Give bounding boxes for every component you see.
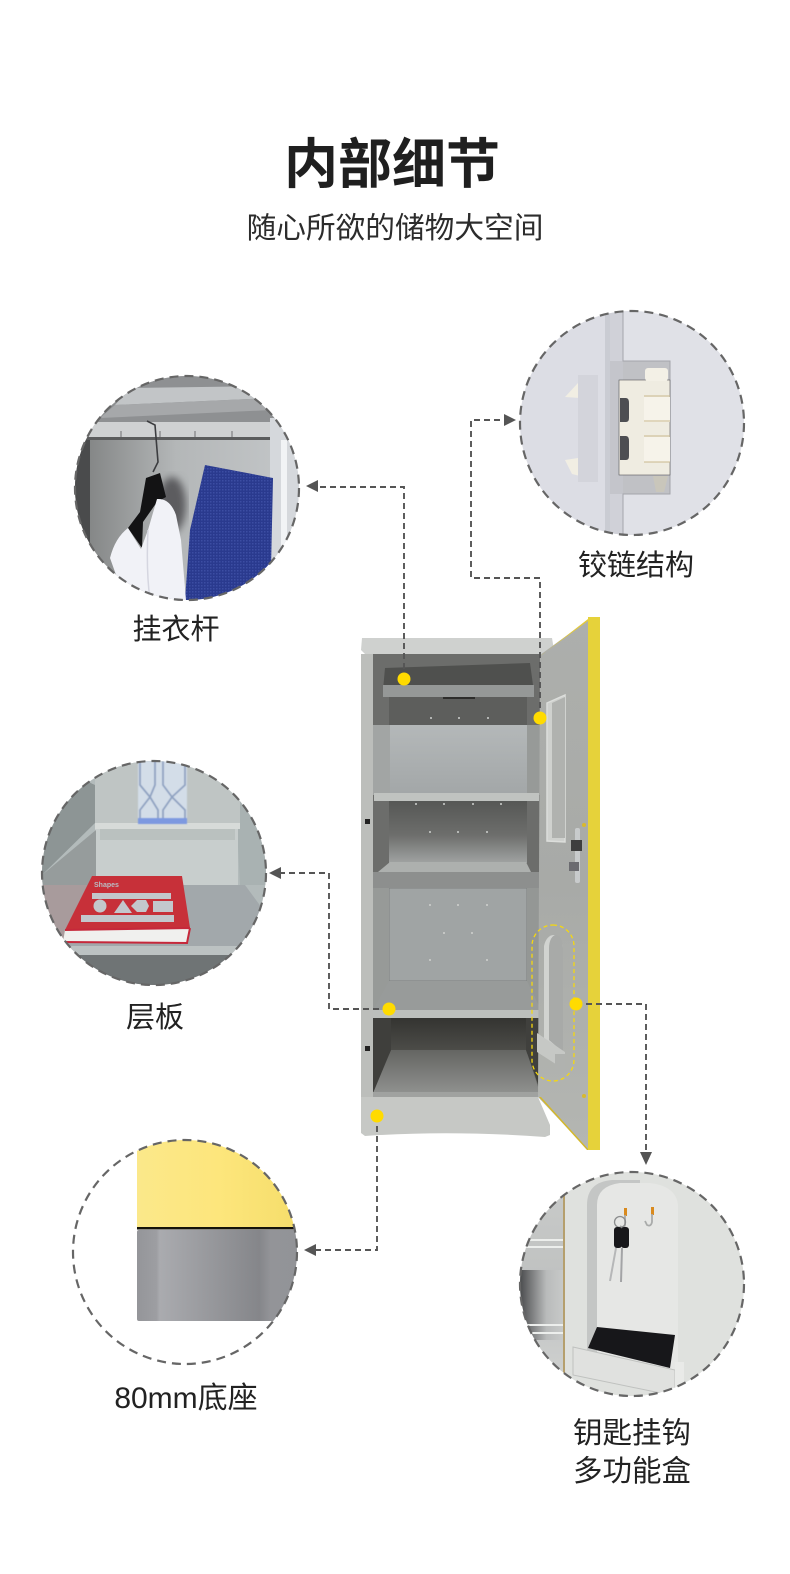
label: key hook and box: 钥匙挂钩	[573, 1417, 691, 1450]
title: 内部细节	[284, 135, 500, 195]
leader: hanging rail	[306, 480, 404, 679]
water bottles	[138, 761, 187, 824]
hooks	[620, 1207, 654, 1227]
label: base: 80mm底座	[114, 1382, 258, 1415]
label: shelf: 层板	[126, 1001, 184, 1034]
yoga mat	[185, 465, 273, 600]
hanger	[128, 421, 166, 548]
circle: shelf detail	[42, 761, 267, 985]
subtitle: 随心所欲的储物大空间	[247, 212, 543, 245]
circle: hanging rail detail	[75, 376, 300, 600]
lock	[569, 823, 586, 883]
door	[537, 617, 600, 1150]
hinge knuckles	[619, 368, 670, 492]
black item in box	[588, 1327, 675, 1368]
locker body side	[361, 654, 374, 1097]
recessed panel	[587, 1180, 640, 1352]
shelf lower	[373, 1010, 541, 1018]
leader: hinge	[471, 414, 540, 718]
book title: Shapes	[94, 882, 119, 889]
top cap	[361, 638, 554, 654]
yellow dashed capsule	[532, 925, 574, 1081]
shelf middle	[378, 862, 531, 872]
body hinge marks	[365, 819, 370, 824]
left fin	[565, 375, 598, 482]
circle: base detail	[73, 1140, 300, 1364]
hinge recess	[623, 361, 670, 494]
hanging rail	[383, 663, 534, 699]
base	[361, 1097, 550, 1137]
marker dots	[370, 672, 582, 1122]
keys	[610, 1216, 629, 1282]
leader: base	[304, 1116, 377, 1256]
storage box	[573, 1347, 675, 1396]
label: key hook and box: 多功能盒	[573, 1455, 691, 1488]
red book	[63, 876, 190, 943]
locker	[361, 617, 600, 1150]
locker interior	[373, 654, 541, 1097]
door hook panel	[537, 935, 565, 1070]
white shirt	[110, 499, 186, 600]
label: hanging rail: 挂衣杆	[132, 613, 220, 646]
circle: key hook box detail	[520, 1172, 745, 1396]
label: key hook and box	[573, 1417, 691, 1488]
door window recess	[547, 695, 565, 842]
label: hinge: 铰链结构	[578, 549, 694, 582]
shelf upper	[374, 793, 539, 801]
circle: hinge detail	[520, 311, 745, 535]
leader: shelf	[269, 867, 389, 1009]
leader: key hook box	[576, 1004, 652, 1165]
